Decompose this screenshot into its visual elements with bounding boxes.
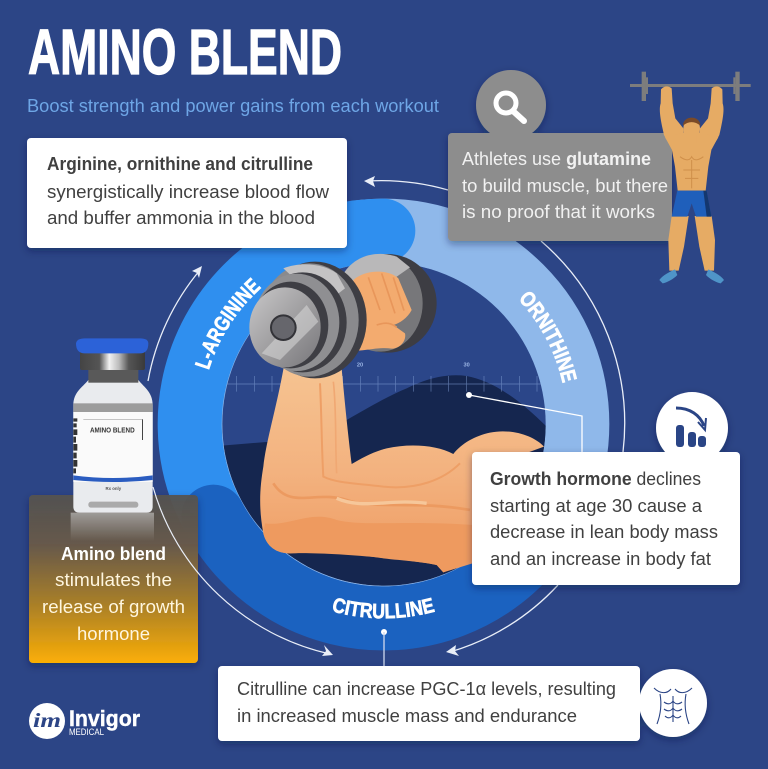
crimp and neck: [88, 367, 138, 383]
panel: growth hormone callout: decrease in lean body mass: [490, 522, 718, 542]
panel: growth hormone callout: [472, 392, 740, 585]
logo: im: [33, 710, 61, 732]
panel: growth hormone callout: and an increase in body fat: [490, 549, 711, 569]
ring: citrulline segment: [213, 506, 559, 618]
panel: amino blend callout: release of growth: [42, 597, 185, 617]
axis labels: 30: [464, 362, 470, 368]
panel: arginine callout: Arginine, ornithine and citrulline: [47, 154, 313, 174]
icon: magnifier: [476, 70, 546, 140]
panel: growth hormone callout: starting at age 30 cause a: [490, 496, 703, 516]
icon: vial: [71, 338, 154, 541]
vial reflection: [71, 513, 154, 541]
ring: ornithine segment: [191, 231, 577, 617]
icon: declining bars: [656, 392, 728, 464]
small print: Rx only: [106, 486, 122, 491]
panel: arginine callout: [27, 138, 347, 248]
arrowheads: [192, 176, 459, 656]
torso shading: [680, 157, 703, 188]
axis labels: 20: [357, 362, 363, 368]
glass base: [88, 502, 138, 508]
logo: Invigor: [69, 706, 140, 731]
hair: [683, 118, 700, 126]
panel: amino blend callout: hormone: [77, 624, 150, 644]
panel: glutamine callout: [448, 70, 672, 241]
panel: growth hormone callout: Growth hormone declines: [490, 469, 701, 489]
panel: amino blend callout: [29, 495, 198, 663]
shoulder band: [73, 403, 153, 412]
panel: citrulline callout: [218, 666, 707, 741]
barbell: [630, 72, 751, 101]
logo: MEDICAL: [69, 727, 104, 737]
ring: l-arginine segment: [190, 231, 383, 517]
flow arrow over amino panel: [153, 487, 330, 654]
panel: amino blend callout: Amino blend: [61, 544, 166, 564]
icon: abdominal muscles: [639, 669, 707, 737]
leader line: citrulline: [381, 629, 387, 668]
athlete lifting barbell: [630, 72, 751, 283]
shorts shadow: [703, 191, 711, 217]
body: [660, 86, 724, 271]
barcode: [73, 418, 77, 473]
panel: citrulline callout: in increased muscle mass and endurance: [237, 706, 577, 726]
inner chart panel: [217, 257, 550, 590]
label: l-arginine: L-ARGININE: [194, 277, 262, 370]
age axis ticks: [225, 376, 542, 392]
logo: [29, 703, 140, 739]
vial glass: [73, 380, 153, 513]
axis labels: [357, 362, 470, 366]
title: AMINO BLEND: [28, 16, 342, 88]
muscular arm: [260, 350, 544, 572]
decline curve area: [217, 375, 550, 590]
leader line: growth hormone: [466, 392, 582, 455]
blue stripe: [73, 475, 153, 482]
central ring diagram: [158, 198, 610, 650]
flow arrows: [148, 176, 625, 656]
panel: citrulline callout: Citrulline can increase PGC-1α levels, resulting: [237, 679, 616, 699]
label: [73, 412, 153, 482]
panel: amino blend callout: stimulates the: [55, 570, 172, 590]
panel: arginine callout: and buffer ammonia in the blood: [47, 208, 315, 228]
panel: glutamine callout: to build muscle, but there: [462, 176, 668, 196]
panel: glutamine callout: Athletes use glutamine: [462, 149, 651, 169]
panel: arginine callout: synergistically increase blood flow: [47, 182, 330, 202]
dumbbell back plate and fist: [337, 254, 437, 353]
blue cap: [76, 338, 148, 353]
label: citrulline: CITRULLINE: [333, 598, 435, 619]
label name: AMINO BLEND: [90, 427, 135, 434]
subtitle: Boost strength and power gains from each workout: [27, 96, 439, 116]
dumbbell front plates: [249, 262, 367, 378]
panel: glutamine callout: is no proof that it works: [462, 202, 655, 222]
shorts: [672, 191, 711, 217]
label: ornithine: ORNITHINE: [520, 292, 578, 384]
shoes: [659, 269, 724, 283]
